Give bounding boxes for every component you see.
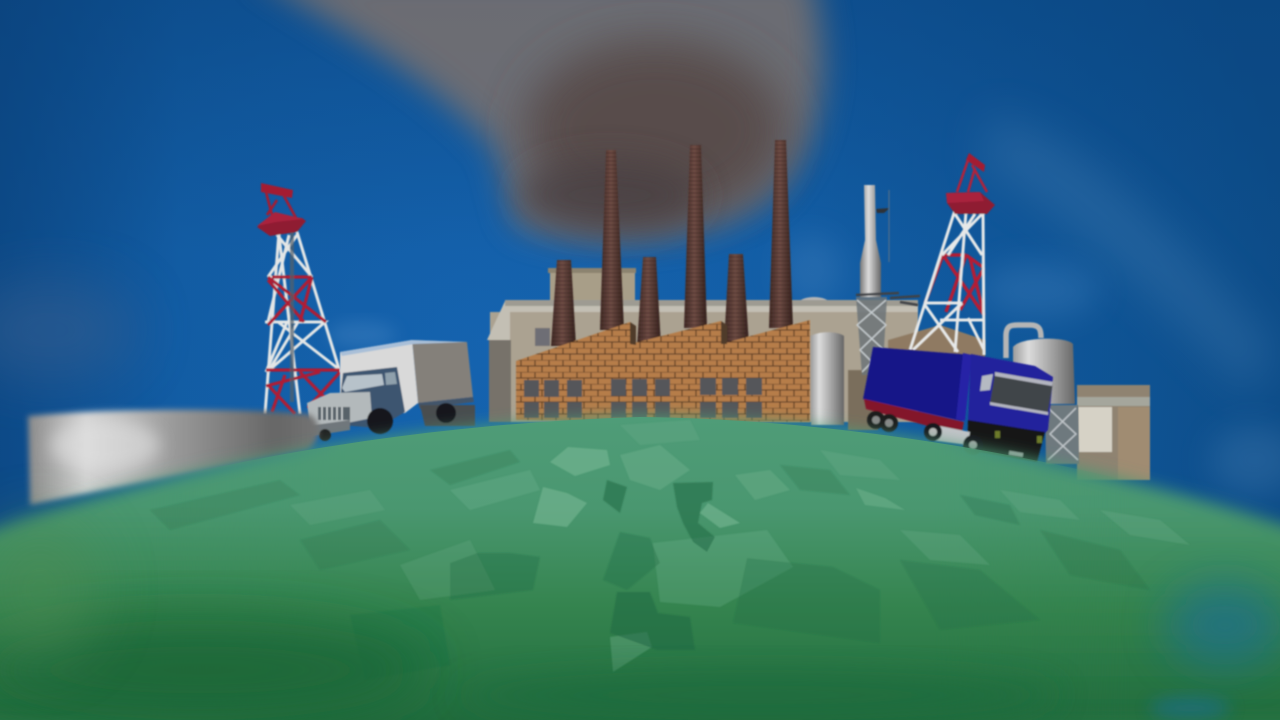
short chimneys [551, 254, 749, 346]
derrick legs and white braces [910, 210, 984, 355]
blurred dark lower centre [460, 670, 1060, 720]
steel flue and lattice [856, 185, 920, 375]
cab [968, 354, 1053, 433]
tank lattice [1045, 405, 1079, 464]
grey cylinder [811, 332, 844, 425]
right annex building [1077, 385, 1150, 480]
derrick crown [946, 153, 995, 214]
red braces [266, 277, 340, 414]
red chassis [864, 399, 964, 432]
blue sea patch [1165, 583, 1280, 667]
darker facets [152, 450, 1122, 650]
curved pipe [1006, 325, 1041, 358]
truck box [340, 340, 474, 413]
white box truck [307, 340, 475, 441]
globe land facets [150, 420, 1190, 680]
truck cab [307, 367, 405, 436]
silver tank [1013, 339, 1075, 404]
lighter facets [290, 420, 1190, 672]
windows [524, 378, 762, 418]
cab lower [967, 420, 1045, 462]
derrick legs and white braces [265, 232, 340, 414]
back building [487, 268, 1150, 480]
factory [516, 140, 844, 425]
red braces [925, 255, 984, 315]
silver storage tank [28, 410, 318, 505]
blurred dark lower-left [0, 620, 430, 720]
green globe [0, 417, 1280, 720]
brick sawtooth wall [516, 320, 810, 422]
right oil derrick [910, 153, 995, 355]
blue semi truck [863, 347, 1053, 462]
derrick crown [257, 183, 306, 236]
left oil derrick [257, 183, 340, 414]
trailer side [863, 347, 972, 421]
right tank and pipes [1006, 325, 1079, 464]
tall chimneys [600, 140, 793, 330]
smoke cloud [250, 0, 823, 242]
